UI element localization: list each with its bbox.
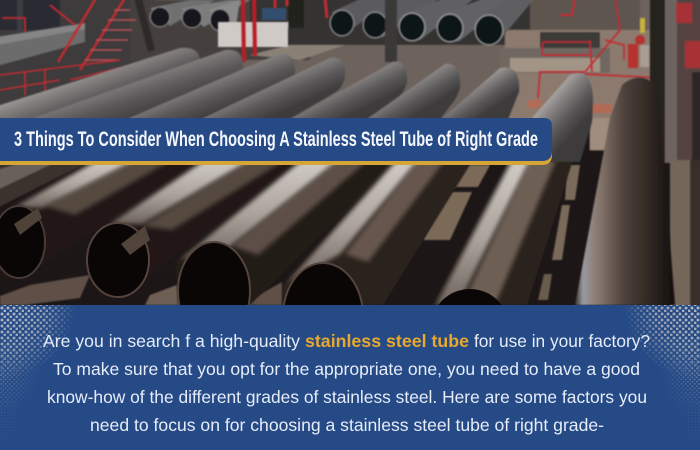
intro line 1: for use in your factory? [474, 331, 650, 351]
red stairs and pillars [0, 0, 660, 98]
intro line 1: Are you in search f a high-quality [43, 331, 300, 351]
tube 6 [575, 78, 675, 305]
rollers between tubes below banner [0, 160, 700, 310]
banner gold underline [0, 125, 552, 165]
left tube below banner [0, 160, 92, 208]
panel background [0, 305, 700, 450]
intro line 4: need to focus on for choosing a stainless steel tube of right grade- [90, 415, 604, 435]
far ends of tubes above banner [0, 48, 519, 131]
factory floor background [0, 0, 700, 313]
banner blue panel [0, 118, 552, 161]
tube 4 with mouth [283, 160, 473, 369]
tube 2 with mouth [87, 160, 305, 298]
intro line 2: To make sure that you opt for the appropriate one, you need to have a good [53, 359, 640, 379]
intro line 1 [43, 331, 650, 351]
tube 5 with mouth [432, 73, 593, 361]
intro line 3: know-how of the different grades of stainless steel. Here are some factors you [47, 387, 647, 407]
tube 1 with mouth [0, 160, 205, 278]
top row of tubes with open mouths [150, 0, 535, 62]
title banner [0, 118, 552, 165]
tube 3 with mouth [175, 160, 398, 340]
highlighted phrase: stainless steel tube [305, 331, 469, 351]
halftone dots: right corner [626, 305, 700, 436]
upper-left tube and machinery [0, 0, 304, 66]
panel: intro text [0, 305, 700, 450]
right-side equipment [628, 0, 700, 164]
halftone dots: left corner [0, 305, 74, 436]
